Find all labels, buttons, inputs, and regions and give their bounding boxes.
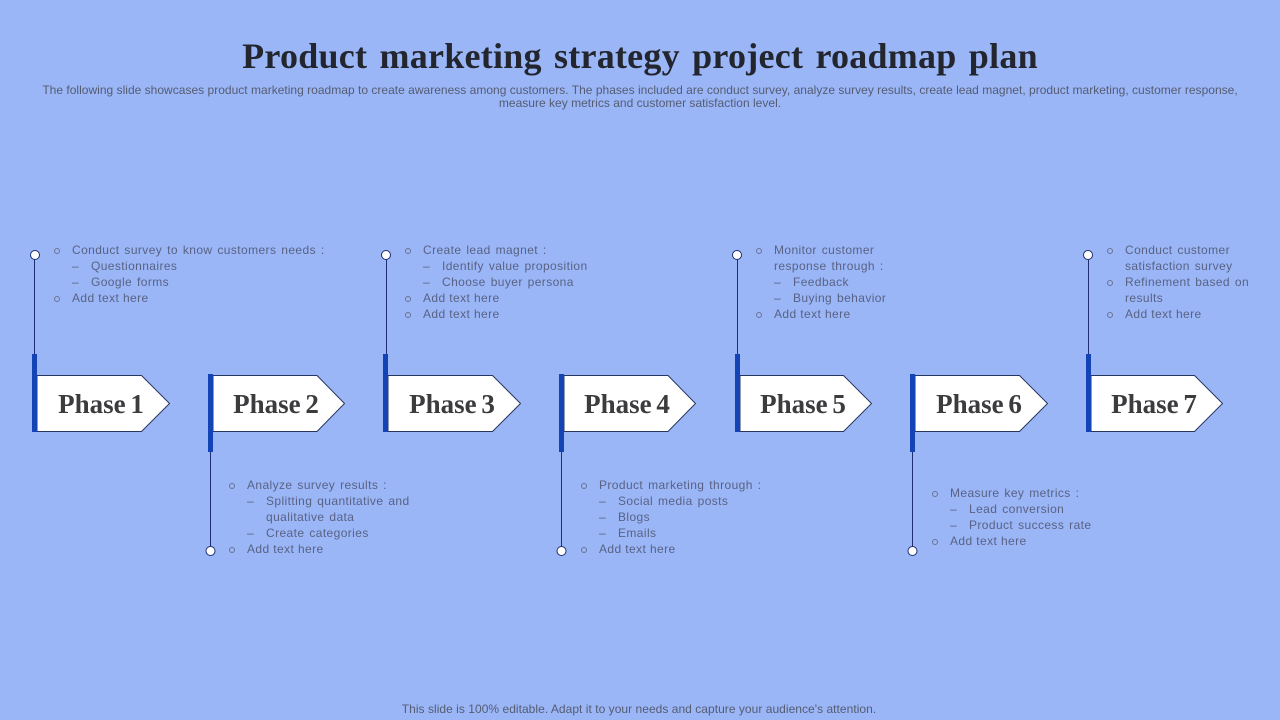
text block: phase 6 bbox=[932, 486, 1091, 548]
text block: phase 1: Conduct survey to know customers needs : bbox=[72, 243, 325, 257]
text block: phase 1 bbox=[54, 243, 325, 305]
text block: phase 6: Measure key metrics : bbox=[950, 486, 1079, 500]
text block: phase 3: Create lead magnet : bbox=[423, 243, 547, 257]
phase 6 flag bbox=[908, 374, 1048, 556]
text block: phase 5 bbox=[756, 243, 886, 321]
text block: phase 7: satisfaction survey bbox=[1125, 259, 1233, 273]
phase 3 flag bbox=[382, 250, 520, 432]
title: Product marketing strategy project roadmap plan bbox=[242, 36, 1038, 76]
text block: phase 4: Social media posts bbox=[618, 494, 728, 508]
subtitle: measure key metrics and customer satisfaction level. bbox=[499, 96, 781, 110]
phase 6 flag: Phase 6 bbox=[936, 389, 1022, 419]
phase 1 flag: Phase 1 bbox=[58, 389, 144, 419]
text block: phase 2: qualitative data bbox=[266, 510, 354, 524]
phase 5 flag bbox=[732, 250, 872, 432]
text block: phase 3: – bbox=[423, 275, 430, 289]
text block: phase 5: Buying behavior bbox=[793, 291, 886, 305]
text block: phase 1: – bbox=[72, 275, 79, 289]
text block: phase 7: Add text here bbox=[1125, 307, 1202, 321]
subtitle bbox=[42, 83, 1238, 110]
text block: phase 3: Choose buyer persona bbox=[442, 275, 574, 289]
text block: phase 4: – bbox=[599, 526, 606, 540]
text block: phase 2: – bbox=[247, 494, 254, 508]
text block: phase 4: Add text here bbox=[599, 542, 676, 556]
text block: phase 2: Analyze survey results : bbox=[247, 478, 387, 492]
text block: phase 4: – bbox=[599, 510, 606, 524]
phase 2 flag: Phase 2 bbox=[233, 389, 319, 419]
phase 1 flag bbox=[30, 250, 170, 432]
text block: phase 6: – bbox=[950, 502, 957, 516]
text block: phase 7 bbox=[1107, 243, 1249, 321]
text block: phase 5: response through : bbox=[774, 259, 884, 273]
footer note: This slide is 100% editable. Adapt it to your needs and capture your audience's attention. bbox=[402, 702, 876, 716]
text block: phase 5: Add text here bbox=[774, 307, 851, 321]
subtitle: The following slide showcases product marketing roadmap to create awareness among customers. The phases included are conduct survey, analyze survey results, create lead magnet, product marketing, customer response, bbox=[42, 83, 1238, 97]
text block: phase 4 bbox=[581, 478, 761, 556]
text block: phase 1: Google forms bbox=[91, 275, 169, 289]
text block: phase 4: Emails bbox=[618, 526, 656, 540]
phase 5 flag: Phase 5 bbox=[760, 389, 846, 419]
text block: phase 2: Splitting quantitative and bbox=[266, 494, 410, 508]
text block: phase 3: Add text here bbox=[423, 291, 500, 305]
phase 2 flag bbox=[206, 374, 344, 556]
text block: phase 5: – bbox=[774, 275, 781, 289]
phase 7 flag: Phase 7 bbox=[1111, 389, 1197, 419]
text block: phase 1: Add text here bbox=[72, 291, 149, 305]
text block: phase 5: Monitor customer bbox=[774, 243, 874, 257]
text block: phase 3: – bbox=[423, 259, 430, 273]
text block: phase 7: results bbox=[1125, 291, 1163, 305]
text block: phase 6: Lead conversion bbox=[969, 502, 1064, 516]
text block: phase 7: Conduct customer bbox=[1125, 243, 1230, 257]
text block: phase 2: Add text here bbox=[247, 542, 324, 556]
phase 4 flag: Phase 4 bbox=[584, 389, 670, 419]
phase 3 flag: Phase 3 bbox=[409, 389, 495, 419]
text block: phase 5: Feedback bbox=[793, 275, 849, 289]
text block: phase 1: – bbox=[72, 259, 79, 273]
text block: phase 2: Create categories bbox=[266, 526, 369, 540]
text block: phase 3 bbox=[405, 243, 588, 321]
phase 4 flag bbox=[557, 374, 696, 556]
text block: phase 2 bbox=[229, 478, 410, 556]
text block: phase 4: – bbox=[599, 494, 606, 508]
text block: phase 3: Identify value proposition bbox=[442, 259, 588, 273]
text block: phase 2: – bbox=[247, 526, 254, 540]
text block: phase 6: – bbox=[950, 518, 957, 532]
text block: phase 6: Add text here bbox=[950, 534, 1027, 548]
text block: phase 7: Refinement based on bbox=[1125, 275, 1249, 289]
text block: phase 5: – bbox=[774, 291, 781, 305]
text block: phase 4: Product marketing through : bbox=[599, 478, 761, 492]
text block: phase 6: Product success rate bbox=[969, 518, 1091, 532]
phase 7 flag bbox=[1084, 250, 1222, 432]
text block: phase 1: Questionnaires bbox=[91, 259, 177, 273]
text block: phase 4: Blogs bbox=[618, 510, 650, 524]
text block: phase 3: Add text here bbox=[423, 307, 500, 321]
